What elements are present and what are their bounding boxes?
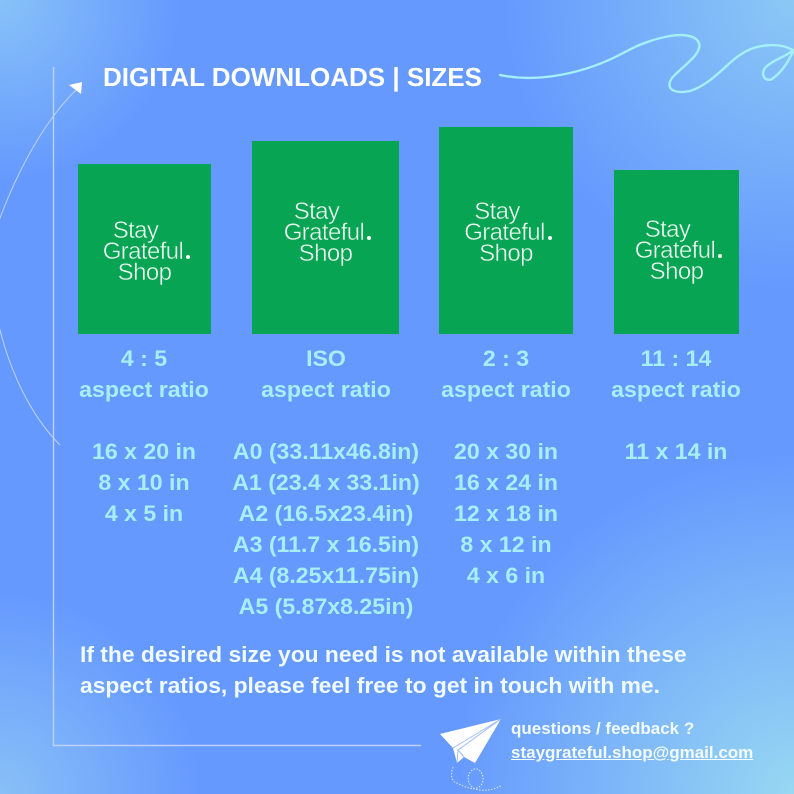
contact text: staygrateful.shop@gmail.com (511, 744, 753, 762)
poster: 11:14 (614, 170, 739, 334)
column: ISO ratio heading (261, 346, 391, 402)
poster: ISO: Shop (299, 240, 352, 267)
column: 4:5 ratio heading: 4 : 5 (121, 346, 167, 371)
column: 11:14 ratio heading (611, 346, 741, 402)
poster: 11:14: Stay (645, 216, 690, 243)
sizes: 4:5: 8 x 10 in (98, 470, 190, 495)
sizes: ISO (232, 439, 420, 619)
column: 2:3 ratio heading: aspect ratio (441, 377, 571, 402)
poster: 4:5 (78, 164, 211, 334)
note: aspect ratios, please feel free to get in touch with me. (80, 673, 660, 698)
sizes: 4:5: 16 x 20 in (92, 439, 196, 464)
column: 2:3 ratio heading (441, 346, 571, 402)
poster: 4:5: Stay (113, 217, 158, 244)
column: 11:14 ratio heading: 11 : 14 (641, 346, 711, 371)
column: 4:5 ratio heading: aspect ratio (79, 377, 209, 402)
poster: 11:14: Grateful (635, 237, 715, 264)
column: 2:3 ratio heading: 2 : 3 (483, 346, 529, 371)
poster: ISO (252, 141, 399, 334)
sizes: ISO: A1 (23.4 x 33.1in) (232, 470, 420, 495)
sizes: ISO: A3 (11.7 x 16.5in) (233, 532, 419, 557)
sizes: ISO: A4 (8.25x11.75in) (233, 563, 419, 588)
poster: ISO: Stay (294, 198, 339, 225)
title: DIGITAL DOWNLOADS | SIZES (103, 62, 482, 92)
poster: 2:3 (439, 127, 573, 334)
note (80, 642, 687, 698)
note: If the desired size you need is not available within these (80, 642, 687, 667)
poster: 11:14: Shop (650, 258, 703, 285)
poster: ISO: Grateful (284, 219, 364, 246)
column: 11:14 ratio heading: aspect ratio (611, 377, 741, 402)
contact text (511, 720, 754, 762)
column: ISO ratio heading: ISO (306, 346, 346, 371)
sizes: 2:3: 12 x 18 in (454, 501, 558, 526)
sizes: 2:3: 8 x 12 in (460, 532, 552, 557)
poster: 2:3: Stay (474, 198, 520, 225)
contact text: questions / feedback ? (511, 720, 694, 738)
sizes: 2:3: 20 x 30 in (454, 439, 558, 464)
poster: 2:3: Grateful (464, 219, 545, 246)
column: 4:5 ratio heading (79, 346, 209, 402)
sizes: 4:5 (92, 439, 196, 526)
sizes: 2:3 (454, 439, 558, 588)
icon: paper plane (440, 718, 502, 791)
sizes: 11:14: 11 x 14 in (625, 439, 727, 464)
poster: 2:3: Shop (479, 240, 533, 267)
column: ISO ratio heading: aspect ratio (261, 377, 391, 402)
sizes: 2:3: 16 x 24 in (454, 470, 558, 495)
sizes: ISO: A5 (5.87x8.25in) (239, 594, 413, 619)
poster: 4:5: Grateful (103, 238, 183, 265)
sizes: ISO: A0 (33.11x46.8in) (233, 439, 419, 464)
poster: 4:5: Shop (118, 259, 171, 286)
sizes: ISO: A2 (16.5x23.4in) (239, 501, 413, 526)
sizes: 2:3: 4 x 6 in (467, 563, 545, 588)
sizes: 4:5: 4 x 5 in (105, 501, 183, 526)
